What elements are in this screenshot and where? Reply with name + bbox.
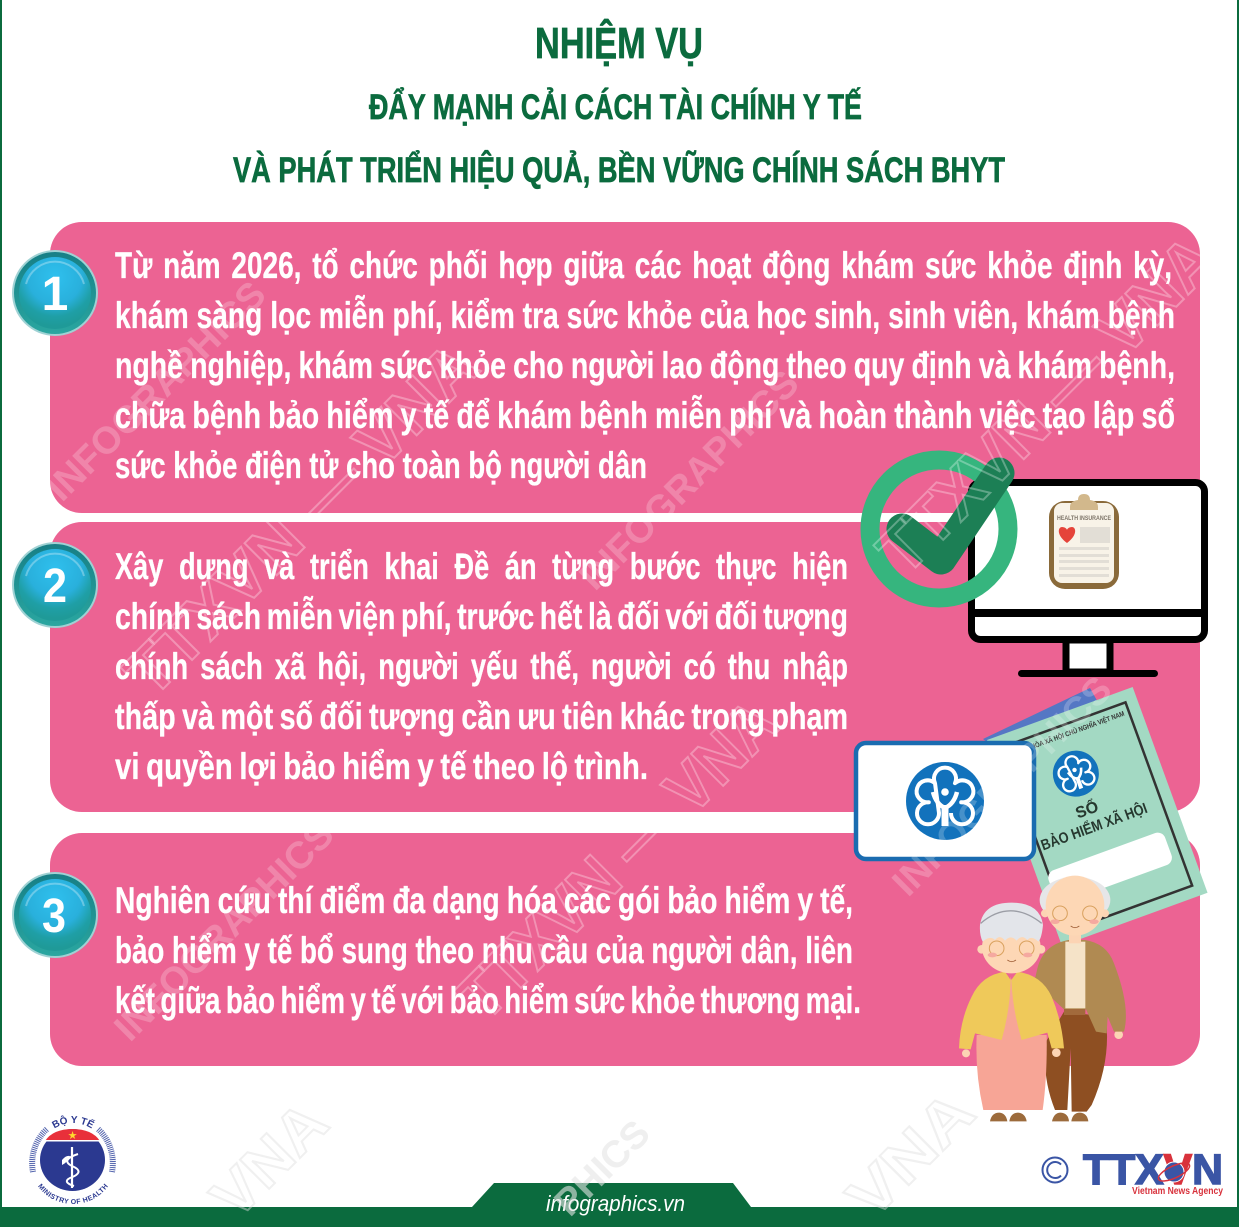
panel 2 text: chính sách miễn viện phí, trước hết là đối với đối tượng (115, 596, 848, 637)
badge 1: 1 (42, 268, 68, 321)
icon: social insurance book: BẢO HIỂM XÃ HỘI (1038, 799, 1150, 854)
watermarks (39, 221, 1230, 1227)
panel 2 text (115, 546, 848, 787)
copyright mark (1042, 1158, 1068, 1182)
logo: TTXVN: Vietnam News Agency (1132, 1186, 1223, 1197)
panel 2 text: Xây dựng và triển khai Đề án từng bước thực hiện (115, 546, 848, 587)
icon: insurance card (856, 743, 1034, 859)
title: NHIỆM VỤ (535, 18, 703, 68)
icon: green check mark (870, 460, 1008, 598)
panel 3 (50, 833, 1200, 1066)
watermarks: TTXVN — VNA (110, 327, 492, 710)
illustration: elderly couple (959, 876, 1126, 1121)
title: VÀ PHÁT TRIỂN HIỆU QUẢ, BỀN VỮNG CHÍNH SÁCH BHYT (233, 150, 1005, 190)
icon: social insurance book: SỔ (1073, 797, 1101, 822)
woman (959, 903, 1064, 1121)
left page border (0, 0, 2, 1210)
badge 2 (12, 542, 98, 628)
panel 1 (50, 222, 1200, 513)
logo: Ministry of Health: MINISTRY OF HEALTH (38, 1184, 108, 1204)
panel 1 text (115, 245, 1175, 486)
logo: Ministry of Health (29, 1115, 116, 1204)
icon: social insurance book: CỘNG HÒA XÃ HỘI CHỦ NGHĨA VIỆT NAM (1012, 709, 1126, 758)
panel 2 text: thấp và một số đối tượng cần ưu tiên khác trong phạm (115, 696, 848, 737)
title: ĐẨY MẠNH CẢI CÁCH TÀI CHÍNH Y TẾ (369, 87, 862, 127)
icon: computer monitor with health insurance clipboard (970, 482, 1206, 677)
icon: social insurance book (983, 687, 1208, 946)
watermarks: TTXVN — VNA (863, 221, 1230, 588)
logo: Ministry of Health: BỘ Y TẾ (52, 1115, 96, 1128)
logo: TTXVN: TTXVN (1083, 1146, 1223, 1194)
panel 2 text: vi quyền lợi bảo hiểm y tế theo lộ trình. (115, 746, 648, 787)
badge 3: 3 (42, 890, 66, 943)
icon: clipboard: HEALTH INSURANCE (1057, 516, 1111, 522)
watermarks: INFOGRAPHICS (572, 363, 807, 598)
man (1034, 876, 1126, 1121)
footer band (0, 1183, 1239, 1227)
watermarks: INFOGRAPHICS (885, 669, 1120, 904)
panel 3 text (115, 880, 861, 1021)
watermarks: INFOGRAPHICS (39, 274, 274, 509)
icon: clipboard (1049, 494, 1119, 589)
watermarks: TTXVN — VNA (443, 685, 792, 1034)
title (233, 18, 1005, 190)
badge 2: 2 (43, 560, 67, 613)
badge 3 (12, 872, 98, 958)
panel 3 text: bảo hiểm y tế bổ sung theo nhu cầu của người dân, liên (115, 930, 853, 971)
panel 2 text: chính sách xã hội, người yếu thế, người có thu nhập (115, 646, 848, 687)
panel 3 text: kết giữa bảo hiểm y tế với bảo hiểm sức khỏe thương mại. (115, 980, 861, 1021)
footer website text: infographics.vn (546, 1191, 685, 1216)
right page border (1237, 0, 1239, 1210)
panel 3 text: Nghiên cứu thí điểm đa dạng hóa các gói bảo hiểm y tế, (115, 880, 853, 921)
panel 1 text: sức khỏe điện tử cho toàn bộ người dân (115, 445, 647, 486)
watermarks: PHICS (547, 1113, 658, 1224)
watermarks: INFOGRAPHICS (107, 814, 342, 1049)
panel 2 (50, 522, 1200, 812)
badge 1 (12, 250, 98, 336)
logo: Ministry of Health: ★ (68, 1130, 78, 1142)
